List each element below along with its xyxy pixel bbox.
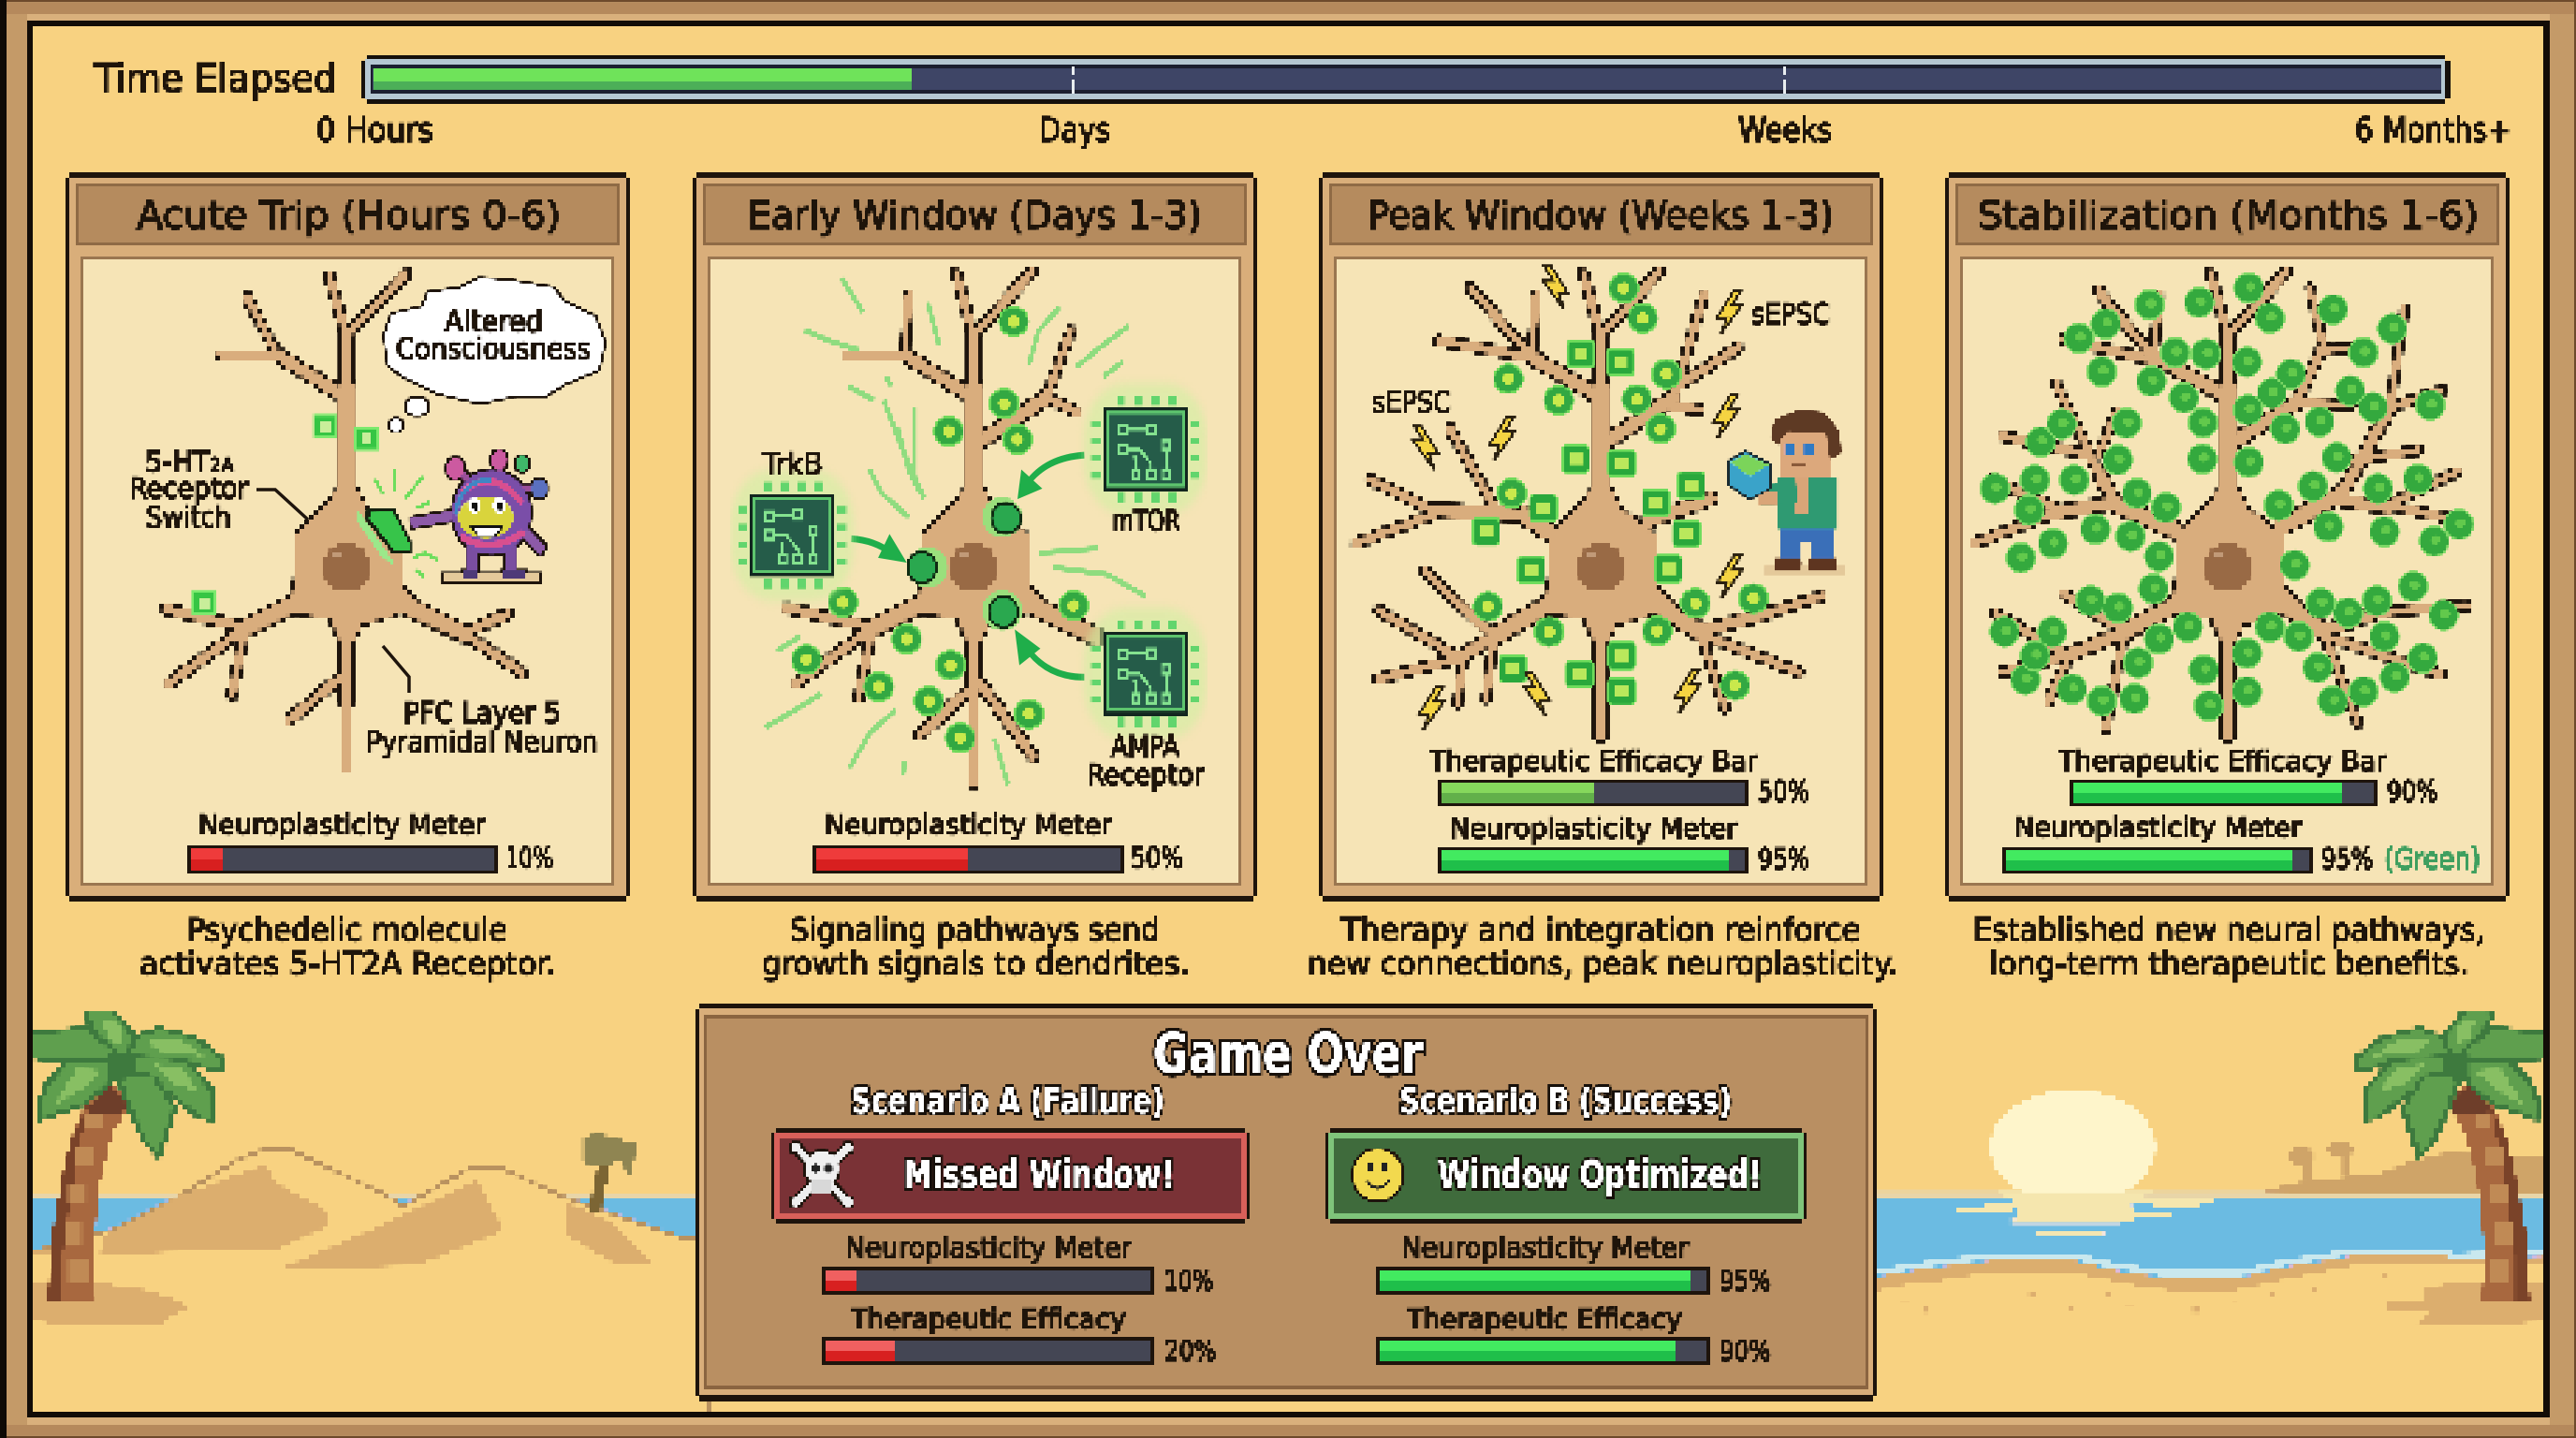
- meter value: 95%: [1758, 843, 1809, 876]
- sEPSC label left: sEPSC: [1372, 386, 1451, 419]
- sEPSC label right: sEPSC: [1751, 298, 1830, 331]
- meter: neuroplasticity 50 percent: [812, 845, 1124, 873]
- chip: TrkB: [731, 470, 854, 601]
- chip: mTOR: [1084, 384, 1207, 515]
- cloud label: Altered: [445, 305, 543, 339]
- ocean: [1872, 1196, 2554, 1281]
- dunes: [18, 1150, 708, 1420]
- value A efficacy: 20%: [1164, 1335, 1216, 1367]
- dune shadows: [18, 1164, 649, 1325]
- panel frame: [693, 172, 1257, 902]
- setting sun: [1990, 1090, 2156, 1204]
- efficacy label: Therapeutic Efficacy Bar: [2057, 745, 2387, 777]
- panel: acute trip: [66, 172, 630, 902]
- panel text: [748, 193, 1205, 875]
- label A efficacy: Therapeutic Efficacy: [850, 1303, 1126, 1335]
- receptor label: Receptor: [129, 472, 248, 506]
- neuron label: [366, 697, 598, 759]
- panel text: [129, 193, 598, 875]
- caption: early window: growth signals to dendrites.: [762, 946, 1190, 983]
- label: 6 months: 6 Months+: [2355, 111, 2511, 150]
- meter value: 50%: [1131, 842, 1183, 875]
- chip: AMPA receptor: [1084, 608, 1207, 740]
- button text A: Missed Window!: [903, 1152, 1175, 1197]
- caption: stabilization: [1973, 912, 2485, 983]
- label: weeks: Weeks: [1738, 111, 1832, 150]
- sEPSC lightning bolts: [1413, 267, 1742, 729]
- timeline labels: [94, 56, 2511, 150]
- tick: weeks: [1783, 66, 1786, 94]
- icon: smiley face: [1354, 1150, 1402, 1200]
- meter: B neuroplasticity: [1376, 1267, 1710, 1295]
- neuron label: Pyramidal Neuron: [366, 726, 598, 759]
- foam: [1872, 1251, 2554, 1273]
- receptor label: [129, 446, 248, 535]
- label: 0 hours: 0 Hours: [316, 111, 433, 150]
- caption: peak window: [1308, 912, 1897, 983]
- caption: acute trip: Psychedelic molecule: [187, 912, 507, 949]
- TrkB label: TrkB: [762, 448, 823, 481]
- neuron label: PFC Layer 5: [403, 697, 561, 730]
- wet sand band: [1872, 1255, 2554, 1420]
- nucleus: [950, 544, 997, 592]
- meter value: 95%: [2321, 843, 2373, 876]
- panel title: Peak Window (Weeks 1-3): [1368, 193, 1834, 238]
- value B efficacy: 90%: [1720, 1335, 1771, 1367]
- scenario B heading: Scenario B (Success): [1399, 1080, 1732, 1122]
- leader lines: [256, 490, 409, 693]
- panel: peak window: [1319, 172, 1883, 902]
- spines: [1981, 273, 2473, 721]
- water left: [18, 1196, 708, 1250]
- meter: B therapeutic efficacy: [1376, 1337, 1710, 1365]
- efficacy value: 50%: [1758, 775, 1809, 809]
- nucleus: [2204, 544, 2251, 592]
- meter: therapeutic efficacy 90 percent: [2070, 780, 2378, 806]
- caption: stabilization: long-term therapeutic benefits.: [1989, 946, 2469, 983]
- neuron with branching dendrites: [786, 271, 1096, 783]
- time elapsed progress bar: [361, 55, 2451, 104]
- AMPA receptor label: [1087, 730, 1205, 792]
- meter label: Neuroplasticity Meter: [2014, 812, 2302, 844]
- nucleus: [323, 544, 370, 592]
- panel title: Early Window (Days 1-3): [748, 193, 1202, 238]
- value B meter: 95%: [1720, 1265, 1771, 1297]
- dendritic spines, thought cloud, molecule: [193, 279, 604, 693]
- neuron with full arbor: [1974, 271, 2466, 732]
- horizon haze right: [1872, 1192, 2554, 1196]
- distant palms: [2289, 1142, 2353, 1180]
- caption: acute trip: activates 5-HT2A Receptor.: [139, 946, 556, 983]
- button: missed window: [771, 1128, 1250, 1224]
- sun reflection: [1956, 1192, 2213, 1234]
- caption: peak window: Therapy and integration reinforce: [1340, 912, 1861, 949]
- spines: [1472, 273, 1768, 705]
- panel text: [1978, 193, 2481, 876]
- neuron with sparse spines: [165, 273, 522, 768]
- label B meter: Neuroplasticity Meter: [1401, 1232, 1689, 1264]
- caption: stabilization: Established new neural pathways,: [1973, 912, 2485, 949]
- small distant palm: [583, 1132, 637, 1214]
- meter: neuroplasticity 95 percent: [1438, 847, 1749, 873]
- caption: early window: Signaling pathways send: [790, 912, 1160, 949]
- nucleus: [1577, 544, 1624, 592]
- activated receptor nodes: [907, 497, 1022, 630]
- caption: peak window: new connections, peak neuroplasticity.: [1308, 946, 1897, 983]
- palm tree right: [2356, 1011, 2551, 1303]
- dry beach: [1872, 1264, 2554, 1420]
- panel frame: [1319, 172, 1883, 902]
- spines: [792, 307, 1088, 752]
- button: window optimized: [1325, 1128, 1807, 1224]
- receptor label: Switch: [146, 501, 231, 535]
- scene: beach, ocean and sunset on the right: [1872, 1090, 2554, 1420]
- distant island: [2265, 1153, 2554, 1196]
- panel: early window: [693, 172, 1257, 902]
- efficacy label: Therapeutic Efficacy Bar: [1428, 745, 1758, 777]
- panel title: Stabilization (Months 1-6): [1978, 193, 2479, 238]
- panel text: [1368, 193, 1834, 876]
- tick: days: [1072, 66, 1075, 94]
- neuron with dense arbor: [1355, 271, 1822, 732]
- panel: game over: [695, 1004, 1877, 1401]
- sand specks and palm shadow: [1901, 1271, 2545, 1325]
- cloud label: [396, 305, 591, 366]
- palm tree left: [27, 1011, 222, 1303]
- receptor label: 5-HT2A: [145, 446, 235, 479]
- green tag: (Green): [2384, 843, 2481, 876]
- meter label: Neuroplasticity Meter: [825, 809, 1112, 841]
- panel title: Acute Trip (Hours 0-6): [137, 193, 561, 238]
- panel body: [695, 1004, 1877, 1401]
- meter: A therapeutic efficacy: [822, 1337, 1154, 1365]
- mTOR label: mTOR: [1112, 505, 1180, 538]
- meter: neuroplasticity 95 percent: [2002, 847, 2313, 873]
- scenario A heading: Scenario A (Failure): [851, 1080, 1164, 1122]
- scene: desert dunes and palm on the left: [18, 1011, 708, 1420]
- spines: green receptor squares: [193, 416, 377, 614]
- label: days: Days: [1039, 111, 1110, 150]
- thought bubble: [385, 279, 604, 432]
- therapist character holding block: [1729, 410, 1845, 575]
- meter value: 10%: [505, 842, 553, 875]
- heading: Game Over: [1153, 1021, 1423, 1087]
- caption: early window: [762, 912, 1190, 983]
- psychedelic molecule character: [411, 450, 547, 582]
- panel frame: [66, 172, 630, 902]
- green growth wisps: [766, 279, 1146, 785]
- meter label: Neuroplasticity Meter: [1450, 813, 1737, 844]
- label B efficacy: Therapeutic Efficacy: [1406, 1303, 1682, 1335]
- horizon haze left: [18, 1192, 708, 1196]
- game over text: [845, 1021, 1771, 1367]
- caption: acute trip: [139, 912, 556, 983]
- AMPA receptor label: Receptor: [1087, 758, 1205, 792]
- meter label: Neuroplasticity Meter: [198, 809, 486, 841]
- meter: A neuroplasticity: [822, 1267, 1154, 1295]
- value A meter: 10%: [1164, 1265, 1213, 1297]
- meter: neuroplasticity 10 percent: [187, 845, 498, 873]
- panel frame: [1945, 172, 2510, 902]
- label: time elapsed: Time Elapsed: [94, 56, 337, 101]
- elapsed fill: [373, 68, 912, 90]
- efficacy value: 90%: [2387, 775, 2437, 809]
- AMPA receptor label: AMPA: [1111, 730, 1179, 764]
- arrows from signaling chips: [852, 455, 1084, 677]
- receptor switch: [358, 470, 438, 577]
- cloud label: Consciousness: [396, 332, 591, 366]
- meter: therapeutic efficacy 50 percent: [1438, 780, 1749, 806]
- panel: stabilization: [1945, 172, 2510, 902]
- icon: skull and crossbones: [791, 1143, 853, 1207]
- button text B: Window Optimized!: [1438, 1152, 1762, 1197]
- label A meter: Neuroplasticity Meter: [845, 1232, 1132, 1264]
